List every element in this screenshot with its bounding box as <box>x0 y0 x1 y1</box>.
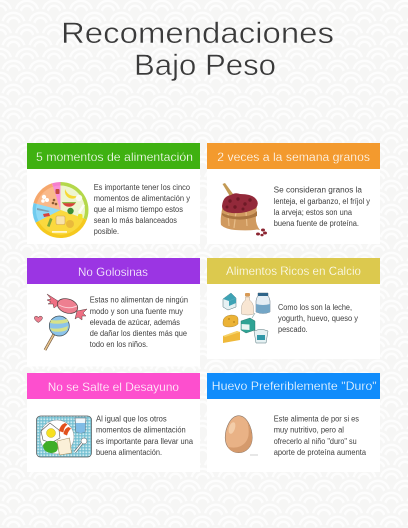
text: Desayuno <box>96 414 194 457</box>
title: Bajo Peso <box>134 49 276 82</box>
text: 5 momentos: momentos de alimentación y <box>94 194 190 203</box>
milk carton <box>223 293 236 310</box>
header: 5 momentos: 5 momentos de alimentación <box>36 150 193 164</box>
title <box>61 17 334 82</box>
panel: Huevo Preferiblemente Duro <box>207 373 380 472</box>
text: Calcio: pescado. <box>278 325 308 334</box>
header: granos: 2 veces a la semana granos <box>217 150 370 164</box>
text: Desayuno: buena alimentación. <box>96 448 162 457</box>
text: Desayuno: es importante para llevar una <box>96 437 194 446</box>
text: 5 momentos: posible. <box>94 227 119 236</box>
panel: 5 momentos de alimentación <box>27 143 200 244</box>
panel: No se Salte el Desayuno <box>27 373 200 472</box>
icon: food plate <box>32 182 88 238</box>
text: No Golosinas: Estas no alimentan de ningún <box>90 296 188 304</box>
panel: Alimentos Ricos en Calcio <box>207 258 380 359</box>
text: 5 momentos: que al mismo tiempo estos <box>94 205 183 214</box>
text: Calcio <box>278 303 358 334</box>
header: No Golosinas: No Golosinas <box>78 265 148 279</box>
text: Huevo: Este alimenta de por si es <box>274 414 359 424</box>
icon: breakfast tray <box>36 416 92 457</box>
text: 5 momentos: sean lo más balanceados <box>94 216 177 225</box>
text: Desayuno: momentos de alimentación <box>96 426 186 434</box>
milk bottle <box>242 293 254 315</box>
header: Calcio <box>207 258 380 284</box>
panel: No Golosinas <box>27 258 200 366</box>
text: Huevo: muy nutritivo, pero al <box>274 426 344 434</box>
text: granos: buena fuente de proteína. <box>274 219 359 228</box>
text: No Golosinas <box>90 296 188 349</box>
text: Calcio: Como los son la leche, <box>278 303 352 312</box>
milk jar <box>256 293 270 314</box>
text: No Golosinas: todo en los niños. <box>90 340 148 349</box>
title: Recomendaciones <box>61 17 334 50</box>
food details <box>65 189 77 199</box>
text: Calcio: yogurth, huevo, queso y <box>278 314 358 323</box>
text: Desayuno: Al igual que los otros <box>96 414 167 424</box>
round cheese <box>223 315 238 327</box>
yogurt cup <box>254 330 268 343</box>
header: No Golosinas <box>27 258 200 284</box>
header: granos <box>207 143 380 169</box>
icon: egg <box>225 416 258 456</box>
icon: bean sack <box>221 183 267 236</box>
cheese wedge <box>223 331 240 343</box>
text: granos: la arveja; estos son una <box>274 208 353 217</box>
text: Huevo: ofrecerlo al niño "duro" su <box>274 437 357 446</box>
header: Huevo <box>207 373 380 399</box>
text: No Golosinas: de dañar los dientes más que <box>90 329 187 338</box>
panel: 2 veces a la semana granos <box>207 143 380 244</box>
text: No Golosinas: elevada de azúcar, además <box>90 318 180 327</box>
text: Huevo: aporte de proteína aumenta <box>274 448 367 457</box>
text: Huevo <box>274 414 367 457</box>
text: No Golosinas: modo y son una fuente muy <box>90 307 183 316</box>
header: Calcio: Alimentos Ricos en Calcio <box>226 264 361 278</box>
header: Desayuno: No se Salte el Desayuno <box>48 380 179 394</box>
text: 5 momentos <box>94 183 191 236</box>
drink carton <box>241 313 255 333</box>
header: Desayuno <box>27 373 200 399</box>
text: granos: lenteja, el garbanzo, el fríjol y <box>274 197 370 206</box>
header: 5 momentos <box>27 143 200 169</box>
text: granos <box>274 186 370 228</box>
text: 5 momentos: Es importante tener los cinco <box>94 183 191 192</box>
icon: candy and lollipop <box>34 294 87 350</box>
header: Huevo: Huevo Preferiblemente "Duro" <box>212 379 377 393</box>
text: granos: Se consideran granos la <box>274 186 363 194</box>
icon: dairy products <box>223 293 270 343</box>
